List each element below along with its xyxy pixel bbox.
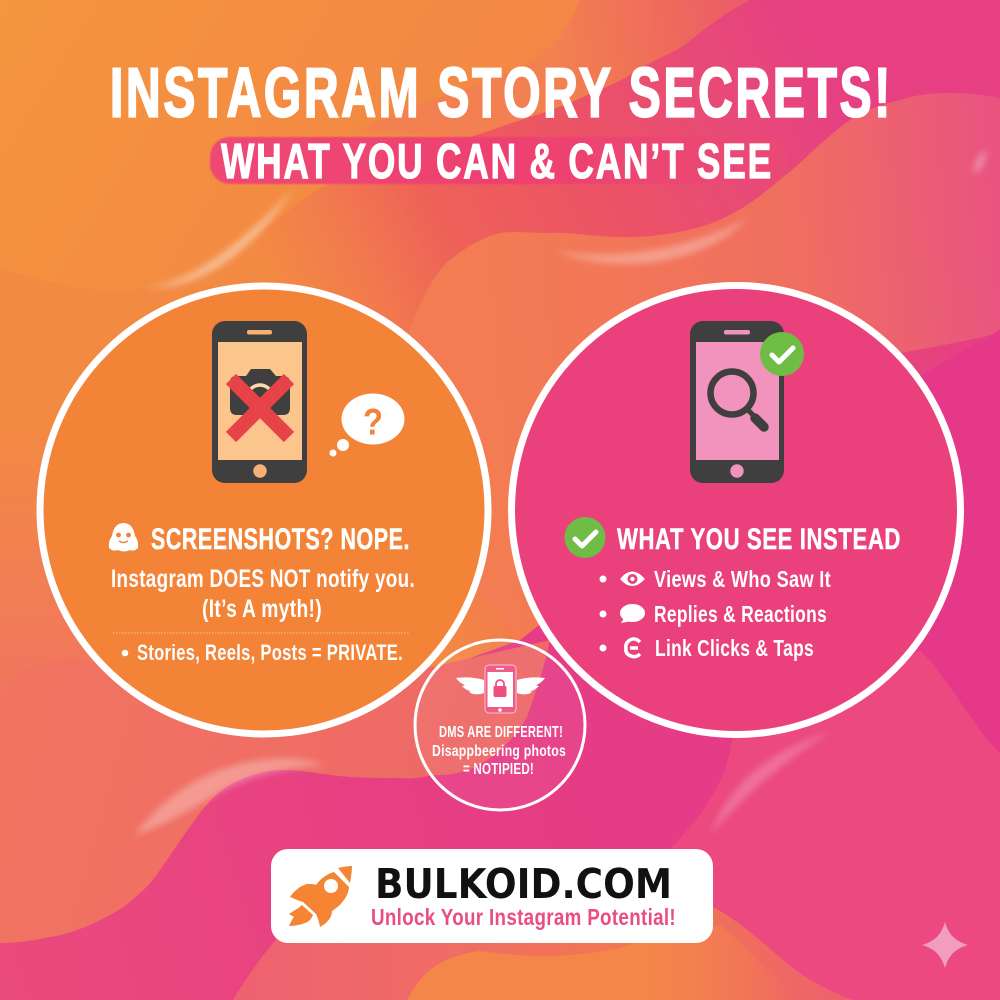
icon: phone with crossed-out camera [212, 321, 307, 483]
heading: screenshots: SCREENSHOTS? NOPE. [151, 523, 410, 556]
icon: winged phone with lock [456, 665, 545, 713]
panel: screenshots (left circle) [40, 286, 488, 734]
heading: what you see instead: WHAT YOU SEE INSTEAD [617, 523, 901, 556]
list item: views: Views & Who Saw It [654, 566, 831, 592]
icon: green check badge [760, 332, 804, 376]
text: DMs are different: DMS ARE DIFFERENT! [439, 724, 563, 741]
decorative highlights [135, 149, 989, 835]
text: disappearing photos: Disappbeering photos [432, 743, 566, 760]
panel: what you see (right circle) [512, 286, 960, 734]
list item: link clicks: Link Clicks & Taps [655, 635, 814, 661]
text: private bullet: Stories, Reels, Posts = PRIVATE. [137, 640, 403, 665]
icon: question thought bubble: ? [363, 402, 383, 442]
list item: views [600, 566, 831, 592]
list item: link clicks [600, 635, 814, 661]
text: myth: (It’s A myth!) [202, 595, 322, 623]
icon: phone with magnifier [690, 321, 784, 483]
icon: rocket [289, 866, 352, 927]
icon: sparkle [922, 922, 968, 968]
brand name: BULKOID.COM [375, 860, 672, 908]
subtitle pill: WHAT YOU CAN & CAN’T SEE [221, 135, 773, 189]
tagline: Unlock Your Instagram Potential! [371, 904, 676, 930]
text: notified: = NOTIPIED! [463, 761, 534, 778]
icon: ghost [109, 523, 138, 552]
list item: replies [600, 601, 827, 627]
panel: DMs callout (small circle) [415, 640, 585, 810]
icon: question thought bubble [330, 394, 404, 456]
text: does not notify: Instagram DOES NOT notify you. [111, 565, 415, 593]
icon: heading check [564, 517, 606, 558]
panel: brand banner [271, 849, 713, 943]
list item: replies: Replies & Reactions [654, 601, 827, 627]
